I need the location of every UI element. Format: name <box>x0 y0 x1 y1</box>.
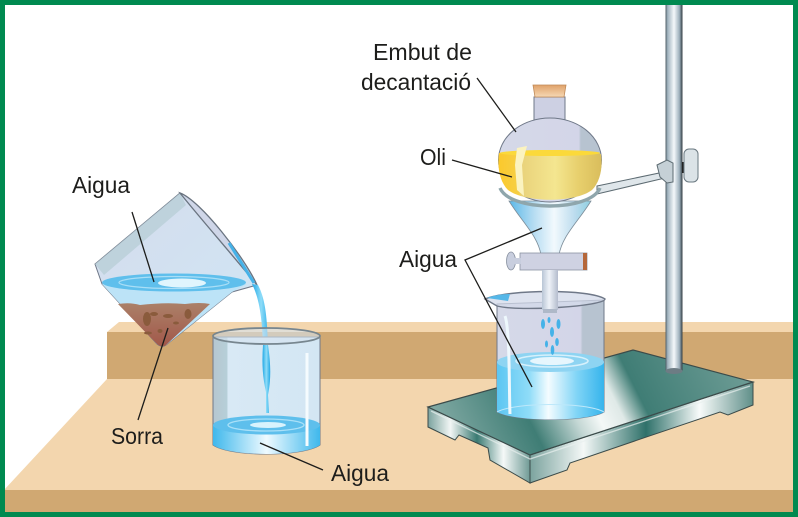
funnel neck <box>534 97 565 121</box>
stem <box>542 270 558 310</box>
label: Aigua funnel: Aigua <box>399 246 457 272</box>
label: Sorra: Sorra <box>111 423 163 449</box>
highlight <box>306 353 308 446</box>
ring stand base plate <box>428 350 753 483</box>
water in beaker <box>497 362 604 420</box>
stand pole <box>666 5 682 374</box>
lower beaker <box>485 270 605 420</box>
stopper <box>533 85 566 97</box>
water <box>213 425 320 454</box>
water surface <box>213 416 320 434</box>
tilted rim <box>180 193 257 285</box>
funnel cone with water <box>509 201 591 255</box>
label: Aigua lower beaker: Aigua <box>331 460 389 486</box>
separating funnel <box>498 85 602 270</box>
oil layer <box>498 150 602 200</box>
funnel bulb <box>498 118 602 202</box>
beaker rim <box>485 292 605 308</box>
tilted beaker pouring <box>95 193 257 346</box>
stopcock <box>506 252 587 270</box>
water surface <box>497 352 604 372</box>
water below surface <box>102 284 247 345</box>
glass body <box>213 337 320 454</box>
sand <box>118 303 210 346</box>
glass body <box>95 193 257 346</box>
leader lines <box>132 78 542 470</box>
label: Aigua tilted beaker: Aigua <box>72 172 130 198</box>
stream inside beaker <box>262 345 270 413</box>
water stream <box>252 284 270 413</box>
beaker body <box>497 300 604 420</box>
water surface <box>102 274 246 292</box>
support ring <box>500 188 600 206</box>
label: Embut de decantació: decantació <box>361 69 471 95</box>
highlight <box>505 316 510 414</box>
rim <box>213 328 320 344</box>
clamp rod and screw <box>597 149 698 194</box>
label: Embut de decantació: Embut de <box>373 39 472 65</box>
upright beaker <box>213 328 320 454</box>
water drops <box>541 317 560 355</box>
label: Oli: Oli <box>420 144 446 170</box>
label: Embut de decantació <box>361 39 472 95</box>
table and back ledge <box>4 322 798 514</box>
